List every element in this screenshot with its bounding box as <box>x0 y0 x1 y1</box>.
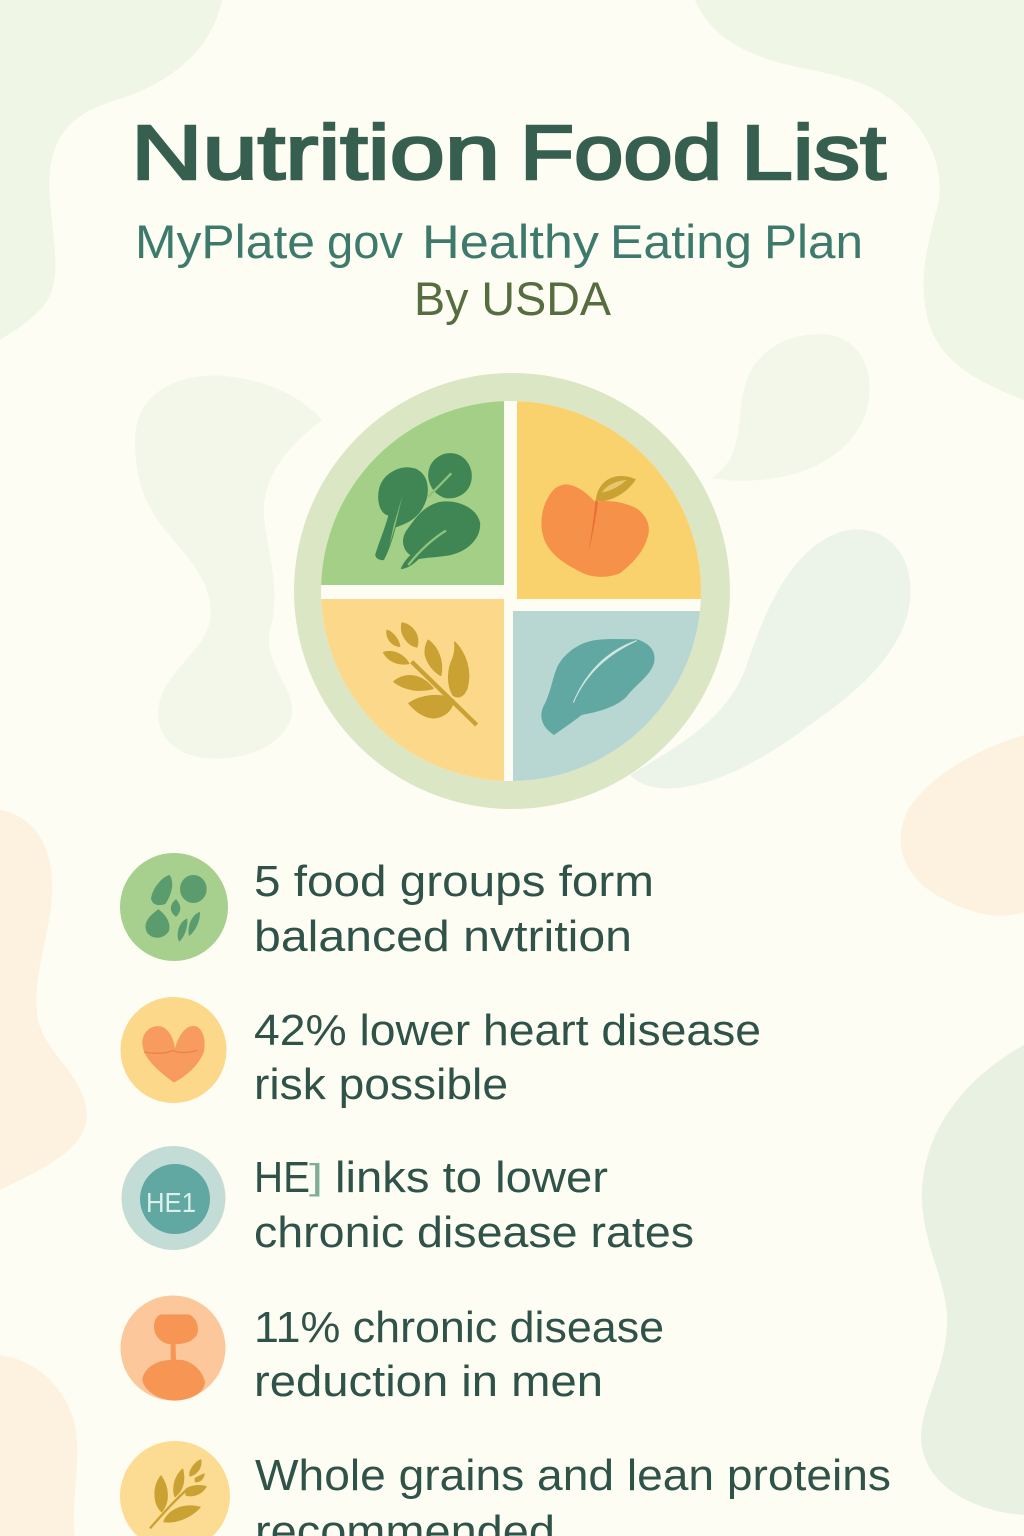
subtitle: gov <box>327 215 403 268</box>
plate diagram <box>294 373 730 810</box>
plate rim <box>294 373 730 809</box>
list item 3 <box>122 1146 694 1257</box>
icon: HEI badge: HE1 <box>146 1187 196 1218</box>
icon: grain sprig <box>120 1441 230 1536</box>
icon: wheat sprig <box>384 623 477 725</box>
list item 4 <box>120 1296 664 1406</box>
text: links to lower <box>335 1153 608 1202</box>
title: List <box>741 110 886 196</box>
food icons <box>376 454 655 735</box>
text: 42% lower heart disease <box>254 1006 761 1055</box>
title <box>131 110 886 196</box>
text: ] <box>309 1156 323 1197</box>
icon: teal leaf <box>541 639 655 735</box>
quadrant fills <box>321 401 701 781</box>
title: Nutrition <box>131 110 500 196</box>
list item 2 <box>120 997 761 1109</box>
title: Food <box>520 110 722 196</box>
subtitle: Eating <box>610 215 752 268</box>
icon: heart <box>120 997 226 1103</box>
icon: vegetable leaves <box>376 454 479 568</box>
text <box>254 1153 694 1257</box>
list item 1 <box>120 853 654 961</box>
subtitle: Healthy <box>422 215 600 268</box>
icon: apple <box>541 476 649 577</box>
icon: HEI badge <box>122 1146 226 1250</box>
icon: food groups <box>120 853 228 961</box>
subtitle: Plan <box>764 215 863 268</box>
subtitle <box>135 215 863 268</box>
list item 5 <box>120 1441 891 1536</box>
text: risk possible <box>254 1060 508 1109</box>
text: 5 food groups form <box>254 857 654 906</box>
text: Whole grains and lean proteins <box>255 1451 891 1500</box>
subtitle byline: By USDA <box>414 272 612 325</box>
subtitle: MyPlate <box>135 215 315 268</box>
text: chronic disease rates <box>254 1208 694 1257</box>
text: HE <box>254 1153 310 1202</box>
text: balanced nvtrition <box>254 912 632 961</box>
icon: person <box>120 1296 226 1401</box>
text: 11% chronic disease <box>254 1303 664 1352</box>
text: reduction in men <box>254 1357 603 1406</box>
